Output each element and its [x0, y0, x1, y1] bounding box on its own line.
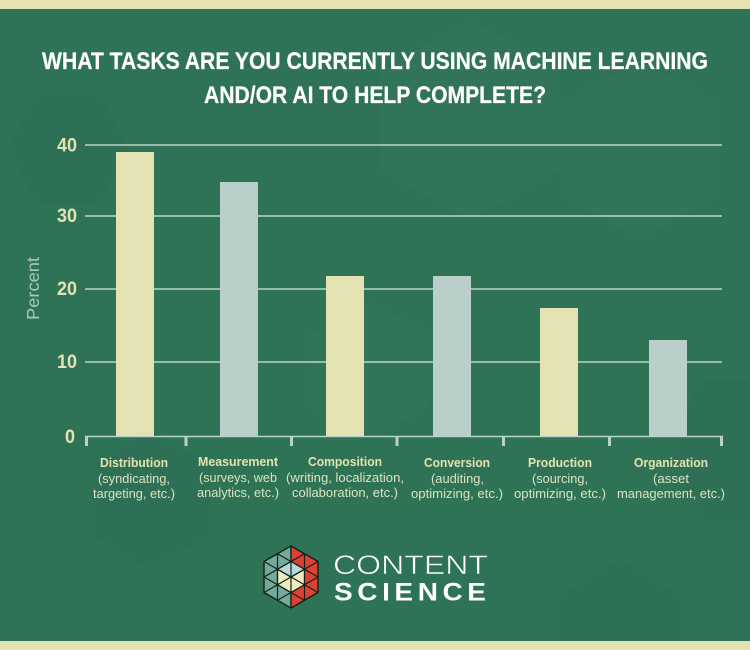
label: Distribution: targeting, etc.) — [93, 486, 175, 501]
label: Measurement: Measurement — [198, 454, 279, 469]
category labels — [93, 454, 725, 501]
wordmark: content: CONTENT — [333, 550, 488, 580]
y-axis tick labels — [57, 134, 77, 448]
label: Conversion: (auditing, — [431, 471, 484, 486]
label: Production: (sourcing, — [532, 471, 588, 486]
label: Organization: Organization — [634, 455, 708, 470]
label: Distribution: Distribution — [100, 455, 168, 470]
label: Conversion: optimizing, etc.) — [411, 486, 503, 501]
bottom band — [0, 641, 750, 650]
label: Distribution: (syndicating, — [98, 471, 170, 486]
label: Production: optimizing, etc.) — [514, 486, 606, 501]
title: AND/OR AI TO HELP COMPLETE? — [204, 82, 546, 109]
title — [42, 48, 708, 109]
label: Production: Production — [528, 455, 592, 470]
bar chart — [116, 152, 687, 436]
label: Measurement — [197, 454, 279, 500]
label: Measurement: (surveys, web — [199, 470, 277, 485]
label: Organization: management, etc.) — [617, 486, 725, 501]
y-axis tick labels: 40 — [57, 134, 77, 156]
y-axis tick labels: 0 — [65, 426, 75, 448]
label: Organization: (asset — [653, 471, 689, 486]
y-axis tick labels: 30 — [57, 205, 77, 227]
y-axis tick labels: 10 — [57, 351, 77, 373]
icon: hexagon mark — [264, 546, 318, 608]
logo: Content Science — [264, 546, 491, 608]
label: Measurement: analytics, etc.) — [197, 485, 279, 500]
label: Conversion: Conversion — [424, 455, 490, 470]
label: Composition — [286, 454, 404, 500]
y-axis title: Percent — [23, 257, 43, 320]
label: Production — [514, 455, 606, 501]
wordmark: science: SCIENCE — [334, 578, 491, 606]
label: Organization — [617, 455, 725, 501]
top band — [0, 0, 750, 9]
label: Composition: (writing, localization, — [286, 470, 404, 485]
label: Conversion — [411, 455, 503, 501]
y-axis tick labels: 20 — [57, 278, 77, 300]
label: Distribution — [93, 455, 175, 501]
x axis with ticks — [85, 436, 723, 446]
label: Composition: Composition — [308, 454, 382, 469]
label: Composition: collaboration, etc.) — [292, 485, 398, 500]
